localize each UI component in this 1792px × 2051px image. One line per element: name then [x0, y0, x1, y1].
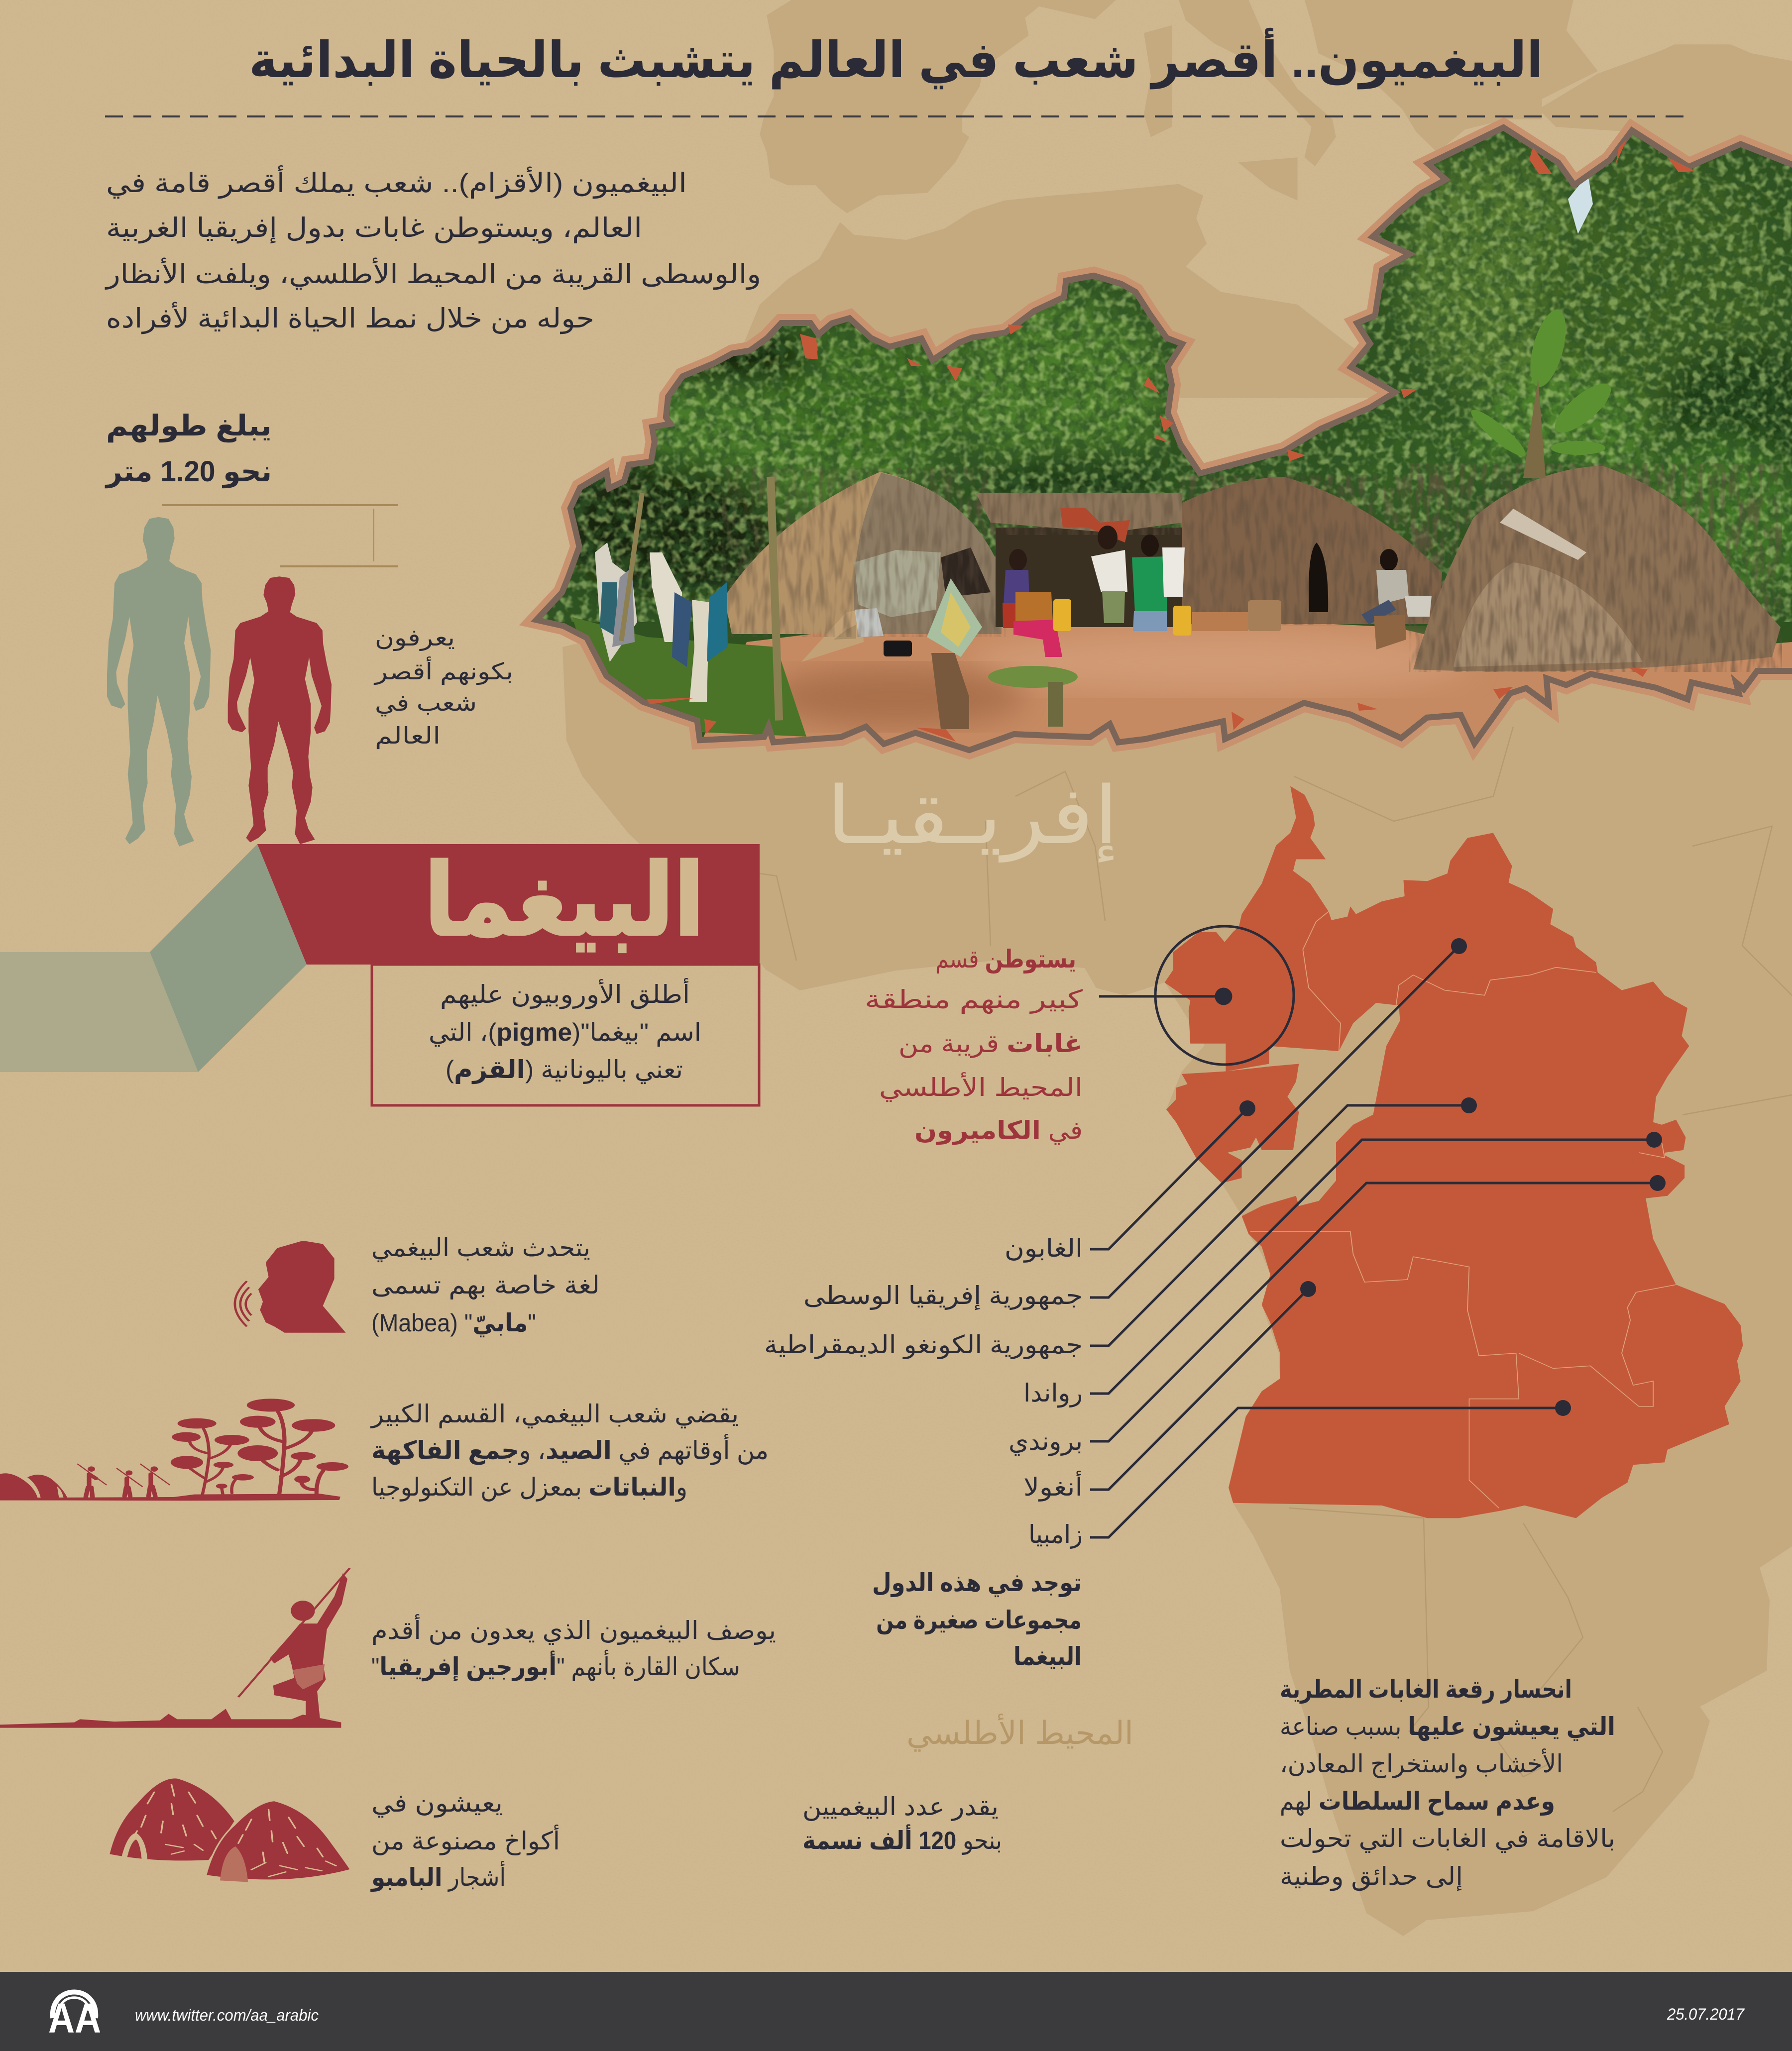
stat: population: يقدر عدد البيغميين: [802, 1793, 999, 1821]
photo border chips: [647, 139, 1695, 742]
height comparison lines: [162, 505, 398, 566]
text: shrinking rainforest: وعدم سماح السلطات لهم: [1280, 1787, 1555, 1816]
list: country names: رواندا: [1023, 1379, 1083, 1408]
caption: shortest people: يعرفون: [375, 625, 455, 651]
text: shrinking rainforest: إلى حدائق وطنية: [1280, 1862, 1463, 1891]
text: shrinking rainforest: انحسار رقعة الغابات المطرية: [1280, 1675, 1572, 1704]
photo: pygmy village with huts in the forest: [538, 124, 1792, 752]
note: small groups: مجموعات صغيرة من: [876, 1606, 1082, 1635]
icon: hunters and trees: [0, 1399, 348, 1501]
footer bar: [0, 1972, 1792, 2051]
definition box: [372, 965, 759, 1105]
stat: population: بنحو 120 ألف نسمة: [802, 1824, 1002, 1855]
ribbon: folded sage ribbon: [0, 844, 307, 1072]
stat: height: [105, 410, 272, 489]
text: hunting and gathering: يقضي شعب البيغمي، القسم الكبير: [370, 1400, 739, 1428]
list: country names: جمهورية إفريقيا الوسطى: [803, 1282, 1083, 1310]
footer date: 25.07.2017: [1667, 2005, 1745, 2023]
icon: bamboo huts: [110, 1778, 351, 1882]
map: Africa and surrounding land: [562, 0, 1792, 1936]
text: hunting and gathering: [370, 1400, 769, 1502]
note: small groups: البيغما: [1013, 1642, 1082, 1670]
photo hut 2: [1182, 475, 1444, 625]
text: huts: [370, 1789, 560, 1892]
caption: shortest people: شعب في: [375, 690, 477, 717]
text: shrinking rainforest: التي يعيشون عليها بسبب صناعة: [1280, 1713, 1615, 1741]
callout: Cameroon circle and leader: [1099, 926, 1294, 1065]
text: shrinking rainforest: [1280, 1675, 1615, 1891]
intro paragraph: والوسطى القريبة من المحيط الأطلسي، ويلفت الأنظار: [105, 257, 761, 290]
stat: height: نحو 1.20 متر: [105, 455, 272, 489]
text: language: يتحدث شعب البيغمي: [371, 1234, 590, 1262]
definition box: تعني باليونانية (القزم): [446, 1056, 683, 1084]
photo hut 3: [1409, 463, 1782, 672]
banner: red heading: [257, 844, 760, 965]
icon: AA logo: AA: [48, 1995, 101, 2042]
callout: Cameroon text: المحيط الأطلسي: [879, 1072, 1083, 1102]
icon: speaking head: [235, 1241, 346, 1333]
callout: Cameroon text: كبير منهم منطقة: [865, 985, 1083, 1014]
list: country names: جمهورية الكونغو الديمقراطية: [764, 1331, 1083, 1360]
banner: red heading: البيغما: [424, 845, 704, 956]
photo sky: [1568, 174, 1593, 234]
callout: Cameroon text: غابات قريبة من: [898, 1030, 1083, 1058]
stat: population: [802, 1793, 1002, 1855]
definition box: اسم "بيغما"(pigme)، التي: [429, 1018, 701, 1047]
photo banana plant: [1466, 306, 1618, 478]
text: aborigines: يوصف البيغميون الذي يعدون من أقدم: [371, 1614, 776, 1645]
leader lines: countries: [1090, 938, 1666, 1537]
intro paragraph: البيغميون (الأقزام).. شعب يملك أقصر قامة في: [106, 165, 687, 199]
text: hunting and gathering: من أوقاتهم في الصيد، وجمع الفاكهة: [371, 1434, 769, 1465]
text: huts: أكواخ مصنوعة من: [371, 1825, 560, 1855]
list: country names: أنغولا: [1023, 1471, 1083, 1502]
text: shrinking rainforest: الأخشاب واستخراج المعادن،: [1280, 1748, 1563, 1779]
list: country names: بروندي: [1008, 1427, 1083, 1456]
text: language: "مابيّ" (Mabea): [371, 1309, 536, 1337]
icon: aborigine hunter with spear: [0, 1568, 350, 1728]
callout: Cameroon text: يستوطن قسم: [935, 945, 1076, 974]
note: small groups: [872, 1569, 1082, 1670]
intro paragraph: حوله من خلال نمط الحياة البدائية لأفراده: [106, 302, 594, 334]
photo left undergrowth: [572, 617, 806, 737]
caption: shortest people: العالم: [375, 723, 441, 749]
callout: Cameroon text: في الكاميرون: [914, 1116, 1083, 1145]
text: aborigines: [371, 1614, 776, 1682]
list: country names: زامبيا: [1028, 1520, 1083, 1549]
intro paragraph: العالم، ويستوطن غابات بدول إفريقيا الغربية: [106, 213, 642, 243]
photo people: [884, 526, 1191, 729]
label: Atlantic Ocean: المحيط الأطلسي: [906, 1713, 1133, 1752]
photo laundry line: [595, 476, 783, 721]
photo seated man and props: [1192, 549, 1432, 649]
stat: height: يبلغ طولهم: [106, 410, 272, 443]
caption: shortest people: [374, 625, 513, 749]
text: aborigines: سكان القارة بأنهم "أبورجين إفريقيا": [371, 1649, 740, 1682]
label: Africa: إفريـقيـا: [826, 771, 1119, 863]
caption: shortest people: بكونهم أقصر: [374, 656, 513, 685]
text: shrinking rainforest: بالاقامة في الغابات التي تحولت: [1280, 1825, 1615, 1853]
photo foliage: [562, 154, 1792, 617]
note: small groups: توجد في هذه الدول: [872, 1569, 1082, 1598]
list: country names: الغابون: [1005, 1234, 1083, 1263]
list: country names: [764, 1234, 1083, 1549]
text: hunting and gathering: والنباتات بمعزل عن التكنولوجيا: [371, 1473, 687, 1502]
footer twitter link: www.twitter.com/aa_arabic: [135, 2006, 319, 2024]
text: huts: يعيشون في: [371, 1789, 503, 1818]
icon: short human silhouette: [228, 576, 332, 844]
icon: tall human silhouette: [107, 517, 211, 847]
title: البيغميون.. أقصر شعب في العالم يتشبث بالحياة البدائية: [249, 27, 1543, 90]
text: language: لغة خاصة بهم تسمى: [371, 1271, 600, 1300]
text: huts: أشجار البامبو: [370, 1861, 506, 1892]
text: language: [371, 1234, 600, 1337]
definition box: أطلق الأوروبيون عليهم: [440, 978, 690, 1009]
photo ground: [697, 617, 1792, 752]
map: highlighted countries: [1165, 786, 1743, 1518]
callout: Cameroon text: [865, 945, 1083, 1145]
photo shelter roof: [976, 493, 1185, 627]
intro paragraph: [105, 165, 761, 334]
photo hut 1: [724, 472, 1002, 662]
